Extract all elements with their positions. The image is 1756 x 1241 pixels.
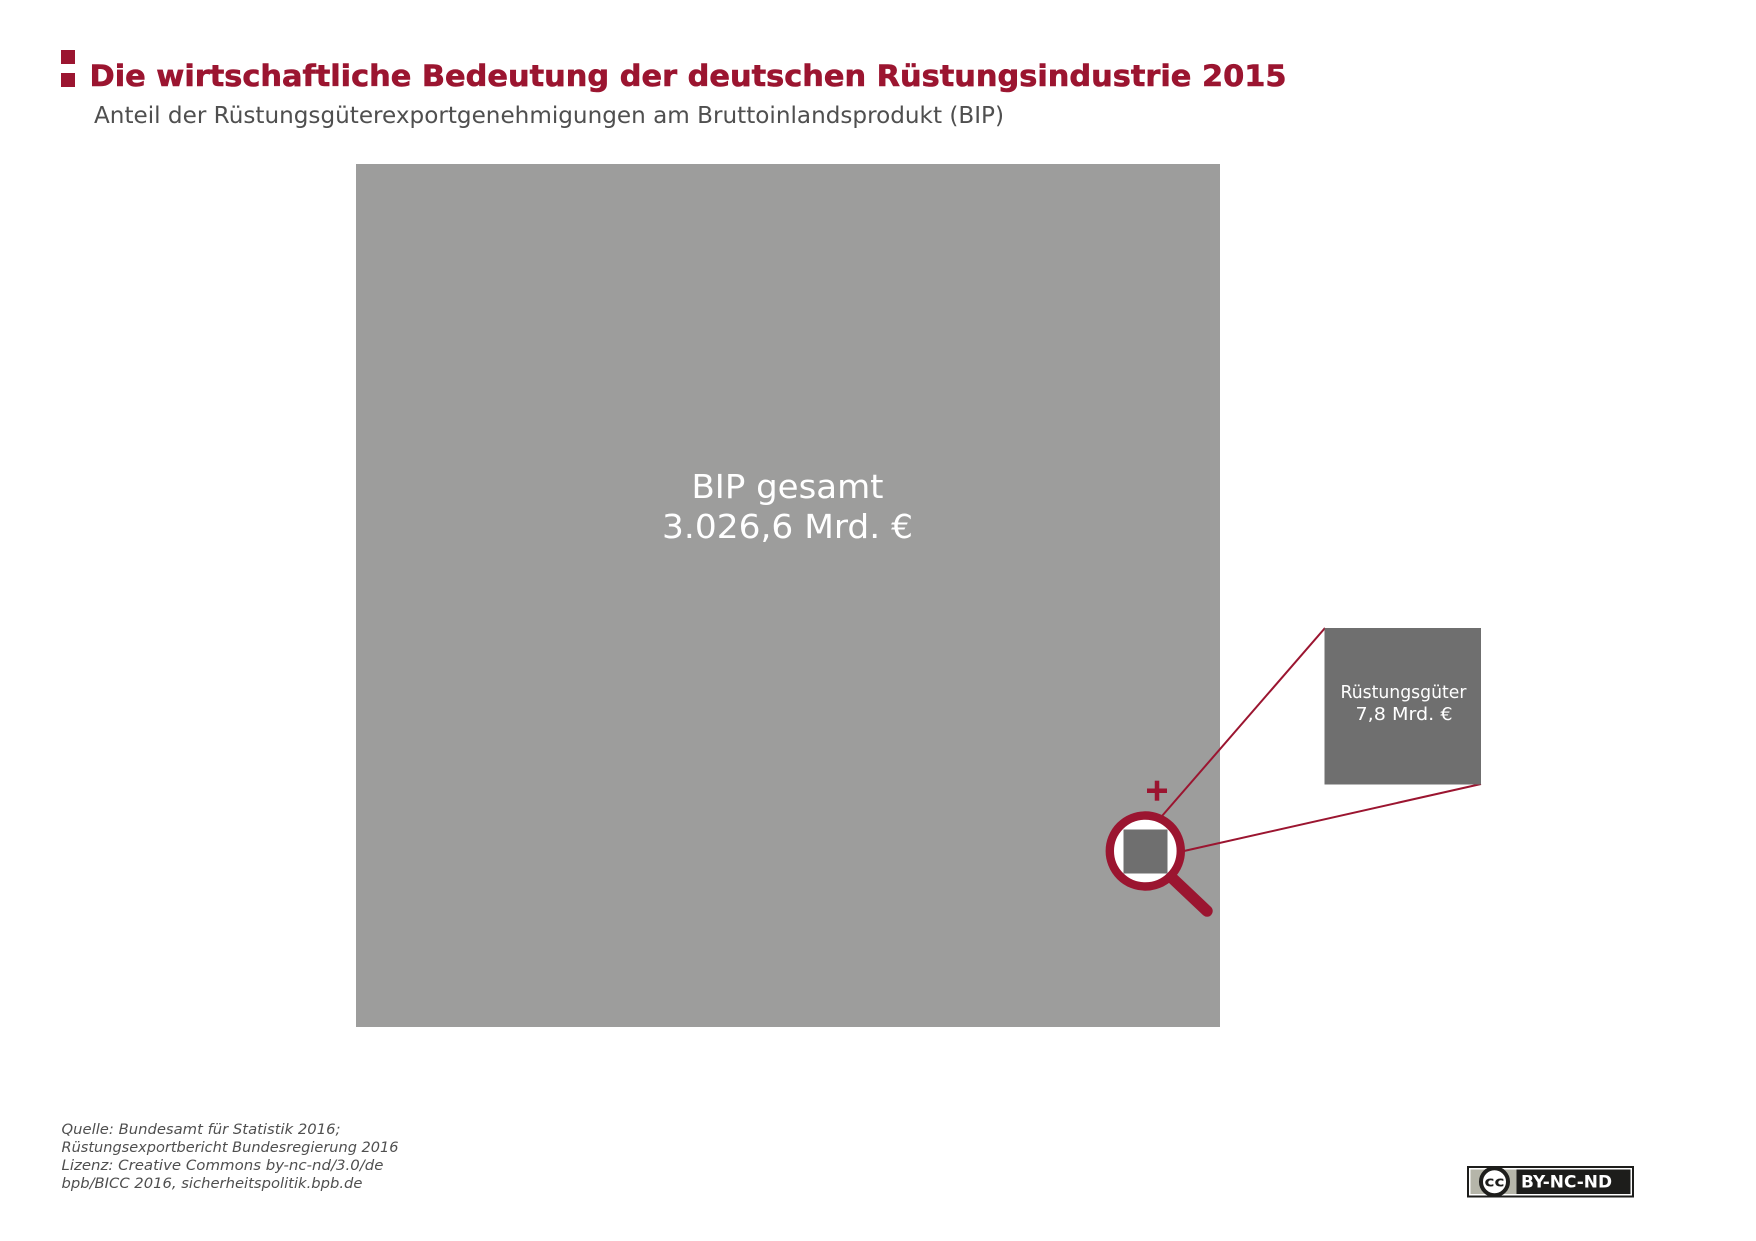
label: BIP gesamt: BIP gesamt bbox=[692, 467, 884, 506]
icon: title colon marker bbox=[61, 50, 75, 87]
icon: CC BY-NC-ND licence badge: BY-NC-ND bbox=[1521, 1172, 1612, 1192]
icon: CC BY-NC-ND licence badge bbox=[1467, 1166, 1634, 1198]
label: Rüstungsgüter: 7,8 Mrd. € bbox=[1356, 704, 1452, 725]
label: Rüstungsgüter bbox=[1340, 682, 1467, 725]
magnifier handle bbox=[1170, 876, 1207, 911]
subtitle: Anteil der Rüstungsgüterexportgenehmigungen am Bruttoinlandsprodukt (BIP) bbox=[94, 103, 1004, 129]
small Rüstungsgüter square bbox=[1124, 830, 1168, 874]
label: BIP gesamt bbox=[662, 467, 913, 546]
source text bbox=[62, 1122, 398, 1192]
source text: Rüstungsexportbericht Bundesregierung 2016 bbox=[62, 1140, 398, 1156]
panel: BIP gesamt square bbox=[356, 164, 1220, 1027]
icon: plus sign bbox=[1147, 781, 1167, 801]
source text: bpb/BICC 2016, sicherheitspolitik.bpb.de bbox=[62, 1176, 363, 1192]
icon: CC BY-NC-ND licence badge: cc bbox=[1484, 1174, 1504, 1190]
source text: Lizenz: Creative Commons by-nc-nd/3.0/de bbox=[62, 1158, 384, 1174]
icon: magnifying glass bbox=[1110, 816, 1207, 911]
magnifier lens bbox=[1110, 816, 1181, 886]
title: Die wirtschaftliche Bedeutung der deutschen Rüstungsindustrie 2015 bbox=[90, 59, 1286, 93]
source text: Quelle: Bundesamt für Statistik 2016; bbox=[62, 1122, 340, 1138]
panel: Rüstungsgüter square bbox=[1324, 628, 1481, 784]
label: Rüstungsgüter: Rüstungsgüter bbox=[1340, 682, 1467, 703]
connector lines bbox=[1162, 628, 1481, 851]
label: BIP gesamt: 3.026,6 Mrd. € bbox=[662, 507, 913, 546]
